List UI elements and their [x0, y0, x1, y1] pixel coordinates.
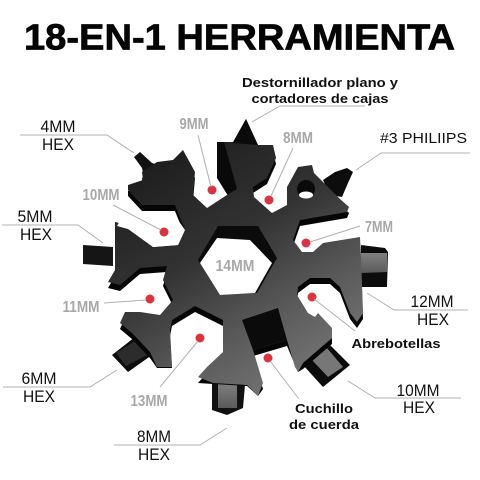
label: 8MM	[264, 130, 313, 204]
label: 8MM: 8MM	[283, 130, 313, 147]
pocket white cleanup: 10mm	[117, 202, 185, 247]
label: flat screwdriver: cortadores de cajas	[252, 91, 388, 106]
label: 6MM HEX: HEX	[23, 387, 55, 406]
label: flat screwdriver	[242, 75, 399, 122]
bit face: 12mm hex	[361, 253, 387, 273]
label: 14MM: 14MM	[216, 258, 254, 275]
label: #3 Philiips: #3 PHILIIPS	[380, 130, 467, 147]
label: 5MM HEX	[2, 207, 103, 244]
label: rope cutter: de cuerda	[289, 417, 360, 432]
metal body	[108, 119, 363, 396]
label: #3 Philiips	[356, 130, 470, 170]
label: 8MM HEX: HEX	[138, 445, 170, 464]
label: 12MM HEX	[367, 292, 468, 329]
label: 11MM	[62, 294, 154, 316]
label: 10MM HEX: HEX	[403, 398, 435, 417]
label: 9MM	[180, 116, 216, 194]
label: 7MM: 7MM	[365, 219, 393, 236]
label: rope cutter	[264, 354, 360, 432]
label: 10MM	[82, 187, 168, 236]
ring hole opening	[299, 192, 313, 198]
bit: 10mm hex	[303, 343, 350, 387]
label: bottle opener	[308, 292, 440, 351]
label: 4MM HEX	[20, 117, 134, 154]
label: rope cutter: Cuchillo	[295, 401, 353, 416]
bit: 6mm hex	[112, 337, 152, 372]
label: 6MM HEX: 6MM	[22, 369, 56, 388]
label: 8MM HEX: 8MM	[137, 427, 171, 446]
label: 12MM HEX: 12MM	[410, 292, 454, 311]
bit face: 10mm hex	[312, 348, 343, 377]
hex socket wall	[198, 226, 277, 295]
bit: 4mm hex	[134, 152, 158, 182]
label: 9MM: 9MM	[180, 116, 208, 133]
label: 4MM HEX: 4MM	[40, 117, 76, 136]
label: 10MM HEX: 10MM	[396, 381, 440, 400]
label: 13MM	[130, 334, 204, 410]
label: flat screwdriver: Destornillador plano y	[242, 75, 399, 90]
spike	[233, 119, 258, 145]
title: 18-EN-1 HERRAMIENTA	[24, 16, 455, 58]
label: 11MM: 11MM	[62, 299, 100, 316]
label: 13MM: 13MM	[130, 393, 168, 410]
label: 10MM HEX	[348, 381, 461, 417]
label: 10MM: 10MM	[82, 187, 120, 204]
bit face: 8mm hex	[218, 383, 237, 408]
label: 8MM HEX	[114, 427, 227, 464]
bit: phillips	[323, 168, 353, 197]
label: 6MM HEX	[3, 369, 117, 406]
top arm side wall	[217, 142, 237, 193]
bit: 12mm hex	[360, 245, 388, 287]
thick metal edge	[108, 125, 363, 396]
label: 7MM	[302, 219, 393, 248]
hex socket opening	[200, 238, 272, 295]
bit: 5mm hex	[83, 245, 113, 266]
bit face: 6mm hex	[116, 341, 147, 366]
label: bottle opener: Abrebotellas	[352, 336, 440, 351]
ring hole	[297, 180, 315, 198]
snowflake multi-tool	[83, 119, 388, 415]
bit: 8mm hex	[212, 383, 245, 415]
label: 5MM HEX: HEX	[20, 225, 52, 244]
black block face	[242, 308, 287, 350]
label: 5MM HEX: 5MM	[18, 207, 52, 226]
label: 4MM HEX: HEX	[42, 135, 74, 154]
label: 12MM HEX: HEX	[417, 310, 449, 329]
